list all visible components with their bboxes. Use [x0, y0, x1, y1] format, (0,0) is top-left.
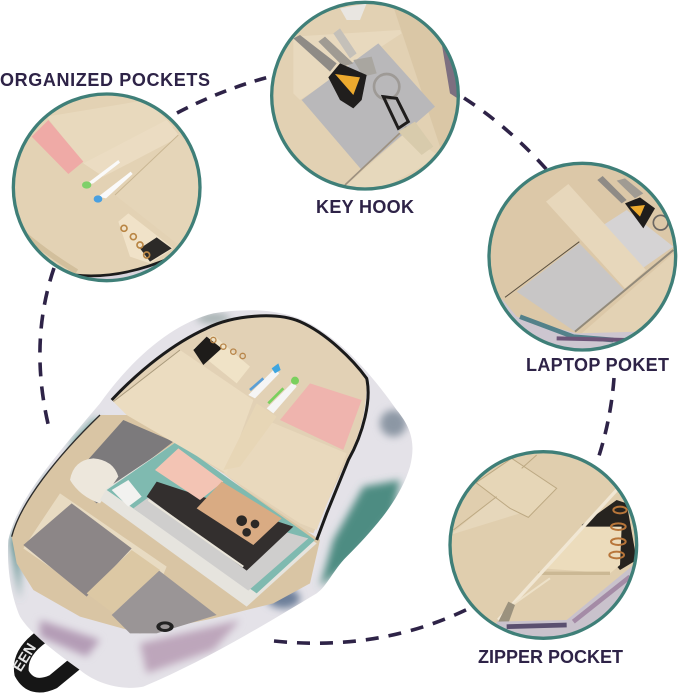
barcode label [112, 480, 142, 507]
carry strap: EEN [10, 641, 40, 675]
heading: key hook: KEY HOOK [316, 197, 414, 217]
spiral notebook [118, 213, 173, 263]
stacked books [100, 442, 317, 607]
front flap [575, 250, 677, 337]
keys [597, 176, 668, 230]
thermos bottle [70, 420, 173, 503]
zipper edge [76, 259, 164, 279]
keys [293, 28, 377, 77]
far laptop [603, 210, 673, 270]
heading: organized pockets: ORGANIZED POCKETS [0, 70, 210, 90]
dashed connector: backpack to zipper pocket [274, 608, 470, 643]
tablet [133, 495, 308, 591]
lining left zipper [12, 415, 100, 537]
strap [546, 184, 646, 288]
lower lining [12, 415, 320, 633]
carry strap [10, 637, 82, 685]
black notebook [147, 482, 293, 571]
dashed connector: organized pockets to backpack [40, 268, 54, 432]
marble body [0, 300, 420, 700]
circle callout: organized pockets [10, 90, 203, 287]
spiral notepad [193, 335, 250, 383]
blue pen [248, 363, 281, 398]
flap lower pocket [223, 422, 347, 530]
lining inner panel [23, 493, 167, 630]
circle callout: zipper pocket [448, 450, 638, 643]
upper flap lining [112, 315, 366, 533]
blue pen [94, 172, 133, 203]
green pen [267, 377, 299, 413]
laptop [505, 242, 624, 332]
pocket strips [84, 127, 178, 176]
circle callout: key hook [270, 0, 460, 193]
pink power bank [155, 448, 223, 500]
pencil slot panel [113, 350, 277, 473]
backpack illustration [0, 300, 420, 700]
webbing strap [87, 550, 160, 613]
heading: laptop pocket: LAPTOP POKET [526, 355, 669, 375]
pink notebook [32, 120, 83, 174]
elastic strap [453, 455, 557, 530]
spiral notebook [538, 500, 637, 573]
strap loop [398, 122, 433, 155]
laptop in pocket [302, 43, 435, 170]
laptop lower-left [23, 503, 217, 633]
gold phone [197, 482, 282, 545]
pink notebook in flap [280, 383, 362, 450]
circle callout: laptop pocket [488, 163, 677, 357]
dashed connector: organized pockets to key hook [177, 76, 273, 113]
dashed connector: laptop pocket to zipper pocket [597, 378, 614, 462]
marble edge [502, 298, 635, 348]
dashed connector: key hook to laptop pocket [464, 98, 547, 170]
vertical strap [344, 126, 435, 187]
main zipper edge [112, 316, 368, 540]
black clip [383, 97, 408, 128]
green pen [82, 160, 120, 189]
heading: zipper pocket: ZIPPER POCKET [478, 647, 623, 667]
zipper [498, 490, 617, 623]
marble edge [496, 566, 632, 636]
yellow key fob [328, 63, 399, 108]
